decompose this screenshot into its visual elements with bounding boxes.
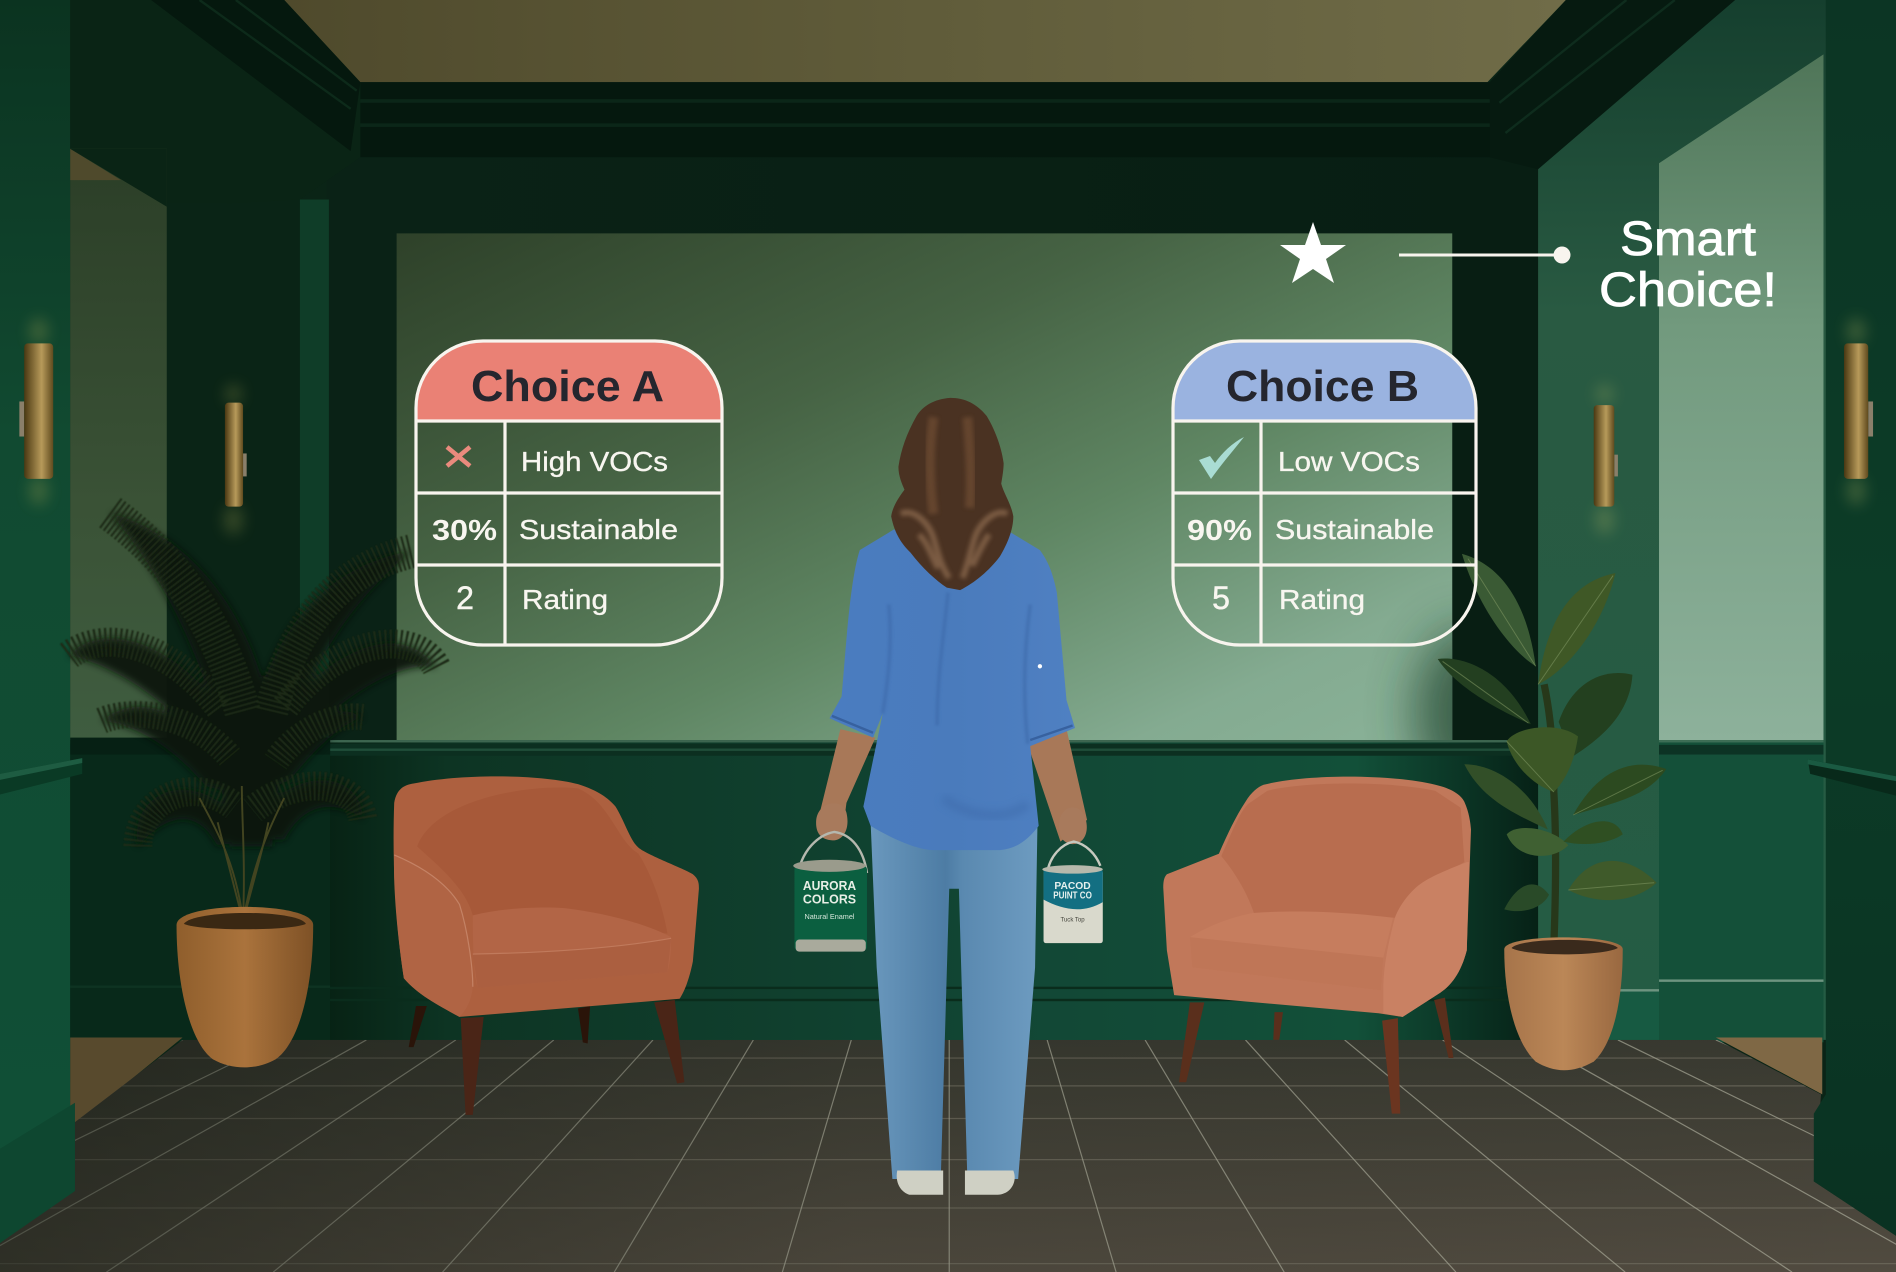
chair left arm — [394, 855, 473, 1017]
icon: check mark — [1199, 437, 1244, 479]
Choice B heading: Choice B — [1226, 362, 1419, 411]
paint can: aurora colors: Natural Enamel — [805, 912, 855, 921]
paint can: white and teal: Tuck Top — [1060, 917, 1085, 923]
woman from behind — [816, 398, 1087, 1195]
right pillar — [1808, 0, 1896, 1236]
left armchair — [394, 776, 699, 1115]
chair legs — [461, 1017, 484, 1115]
chair seat cushion — [473, 908, 671, 988]
rubber plant pot — [1504, 937, 1623, 1070]
30% value: 30% — [432, 515, 497, 547]
Choice B header — [1173, 341, 1476, 421]
tiled floor — [0, 1037, 1896, 1272]
shoes — [897, 1171, 1015, 1195]
Low VOCs row: Low VOCs — [1278, 446, 1420, 477]
right wall — [1538, 0, 1826, 1042]
paint can: aurora colors: COLORS — [803, 891, 856, 906]
wainscot — [326, 740, 1538, 1042]
rating value 5: 5 — [1212, 580, 1230, 616]
icon: cross — [447, 447, 470, 466]
left pillar — [0, 0, 82, 1243]
Choice A heading: Choice A — [471, 362, 664, 411]
crown moulding — [70, 0, 1735, 207]
callout: Smart Choice! — [1599, 213, 1777, 317]
chair back legs — [1179, 998, 1453, 1082]
panel: Choice A — [416, 341, 722, 645]
right armchair — [1163, 777, 1471, 1114]
hands — [816, 803, 1087, 844]
callout: Smart Choice!: Choice! — [1599, 264, 1777, 317]
Choice B table frame — [1173, 341, 1476, 645]
chair right arm — [1383, 862, 1469, 1017]
chair legs — [1382, 1018, 1400, 1114]
ceiling — [284, 0, 1566, 82]
90% value: 90% — [1187, 515, 1252, 547]
icon: star — [1280, 222, 1346, 283]
left wall — [70, 149, 330, 1042]
wall sconces — [19, 318, 1873, 534]
Choice A table frame — [416, 341, 722, 645]
shirt speck — [1038, 664, 1042, 668]
paint can: white and teal — [1042, 842, 1103, 943]
Sustainable row: Sustainable — [519, 514, 678, 545]
High VOCs row: High VOCs — [521, 446, 668, 477]
paint can: aurora colors: AURORA — [803, 878, 856, 893]
palm pot — [177, 907, 313, 1067]
callout: Smart Choice!: Smart — [1620, 213, 1756, 266]
jeans — [871, 822, 1037, 1179]
paint can: white and teal: PUINT CO — [1053, 890, 1092, 901]
Rating row: Rating — [522, 584, 608, 615]
panel: Choice B — [1173, 341, 1476, 645]
wood floor corners — [70, 1037, 1822, 1122]
feature wall panel — [396, 233, 1452, 740]
back wall — [326, 82, 1538, 1050]
Choice A header — [416, 341, 722, 421]
Sustainable row: Sustainable — [1275, 514, 1434, 545]
rating value 2: 2 — [456, 580, 474, 616]
shirt — [830, 530, 1075, 850]
palm plant — [69, 513, 437, 921]
paint can: white and teal: PACOD — [1054, 881, 1091, 892]
palm stems — [200, 786, 284, 921]
chair seat cushion — [1190, 911, 1393, 990]
arrow: leader line to callout — [1399, 246, 1570, 264]
rubber plant — [1438, 554, 1666, 946]
paint can: aurora colors — [793, 832, 867, 952]
arms — [817, 729, 1087, 842]
chair back legs — [409, 1006, 590, 1047]
hair — [891, 398, 1013, 590]
Rating row: Rating — [1279, 584, 1365, 615]
